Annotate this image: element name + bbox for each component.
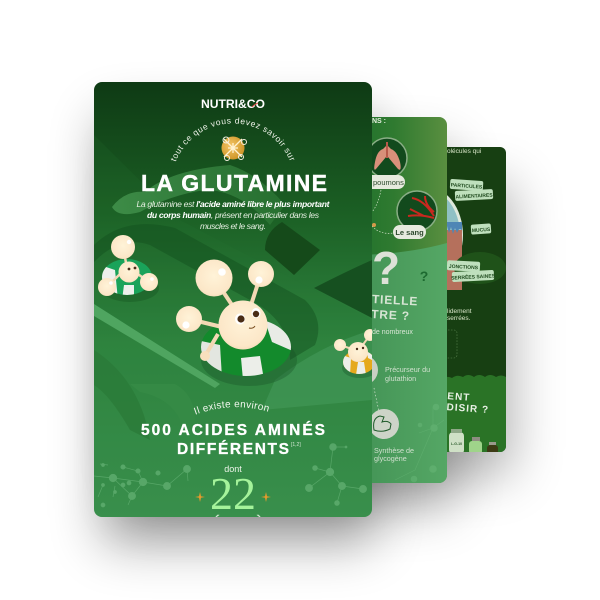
icon: supplement bottles: L-G-10 bbox=[451, 442, 462, 446]
panel: front card, la glutamine bbox=[94, 82, 372, 517]
icon: question marks: ? bbox=[420, 268, 428, 284]
icon: left sparkle bbox=[195, 492, 205, 502]
text: synthese: glycogène bbox=[374, 454, 407, 463]
text: molecules intro: olécules qui bbox=[447, 148, 481, 155]
label: particules bbox=[450, 179, 483, 191]
text: precurseur: Précurseur du bbox=[385, 365, 430, 374]
label: alimentaires: ALIMENTAIRES bbox=[455, 192, 493, 200]
icon: lungs bbox=[372, 137, 408, 175]
arc text: tout ce que vous devez savoir sur: tout ce que vous devez savoir sur bbox=[170, 118, 294, 162]
panel: how to choose bbox=[447, 375, 506, 452]
icon: right sparkle bbox=[261, 492, 271, 502]
character: central molecule bbox=[176, 260, 297, 386]
number: 22: 22 bbox=[210, 468, 256, 519]
background tentacle shapes bbox=[94, 165, 372, 440]
label: particules: PARTICULES bbox=[451, 182, 483, 191]
text: de nombreux: de nombreux bbox=[372, 329, 413, 336]
label: alimentaires bbox=[455, 189, 493, 201]
character: left molecule bbox=[98, 235, 159, 302]
icon: question marks bbox=[374, 252, 428, 284]
text: precurseur: glutathion bbox=[385, 374, 416, 383]
heading: proteinogenes, clipped: PROTÉINOGÈNES bbox=[175, 515, 291, 532]
molecule network: left bbox=[94, 464, 191, 507]
icon: blood vessels bbox=[397, 191, 437, 231]
panel: how to choose: ENT bbox=[447, 391, 471, 404]
molecule network: right bbox=[305, 444, 367, 505]
footnote reference: [1,2] bbox=[291, 442, 301, 448]
molecule network bbox=[395, 404, 444, 482]
panel: middle card, roles bbox=[372, 117, 447, 483]
text: tight junctions: lidement bbox=[447, 308, 472, 315]
arc text: il existe environ: Il existe environ bbox=[194, 401, 269, 414]
heading: 500 acides amines differents: 500 ACIDES AMINÉS bbox=[141, 422, 325, 439]
logo: nutri&co: NUTRI&CO bbox=[201, 99, 265, 111]
illustration: gut tissue circle bbox=[447, 195, 506, 290]
text: synthese: Synthèse de bbox=[374, 446, 414, 455]
label: serrees saines bbox=[451, 270, 496, 282]
icon: glutamine molecule bbox=[222, 136, 246, 160]
text: dont: dont bbox=[224, 464, 242, 474]
intro text: La glutamine est l'acide aminé libre le plus important bbox=[136, 199, 331, 209]
character: right molecule bbox=[334, 329, 372, 378]
panel: back card, intestinal barrier bbox=[447, 147, 506, 452]
panel: how to choose: DISIR ? bbox=[446, 402, 489, 416]
label: mucus bbox=[471, 223, 491, 235]
label: jonctions bbox=[447, 260, 480, 272]
label: mucus: MUCUS bbox=[472, 227, 491, 234]
label: jonctions: JONCTIONS bbox=[449, 264, 479, 271]
heading: essentielle fragment: TRE ? bbox=[371, 307, 410, 323]
heading: 500 acides amines differents: DIFFÉRENTS bbox=[177, 441, 289, 458]
label: poumons: poumons bbox=[373, 178, 404, 187]
connector bbox=[374, 388, 379, 412]
dotted box bbox=[448, 330, 458, 358]
text: synthese bbox=[374, 448, 414, 462]
label: serrees saines: SERRÉES SAINES bbox=[451, 271, 496, 282]
icon: glutathion circle bbox=[372, 358, 378, 382]
logo: nutri&co bbox=[202, 100, 264, 108]
intro text: du corps humain, présent en particulier dans les bbox=[147, 210, 320, 220]
intro text: muscles et le sang. bbox=[200, 221, 266, 231]
label: le sang: Le sang bbox=[395, 228, 424, 237]
text: precurseur bbox=[385, 366, 430, 382]
label: le sang bbox=[393, 225, 426, 239]
text: heading fragment: NS : bbox=[372, 118, 386, 125]
panel: back card, intestinal barrier: serrées. bbox=[447, 315, 471, 322]
icon: supplement bottles bbox=[449, 429, 498, 454]
intro text bbox=[136, 199, 331, 231]
title: LA GLUTAMINE bbox=[141, 170, 327, 196]
heading: essentielle fragment: TIELLE bbox=[372, 292, 418, 308]
icon: muscle bbox=[369, 409, 399, 439]
heading: 500 acides amines differents bbox=[141, 422, 325, 458]
icon: question marks: ? bbox=[372, 242, 400, 294]
label: poumons bbox=[372, 175, 405, 189]
dotted connector bbox=[372, 190, 393, 233]
heading: essentielle fragment bbox=[372, 294, 417, 320]
